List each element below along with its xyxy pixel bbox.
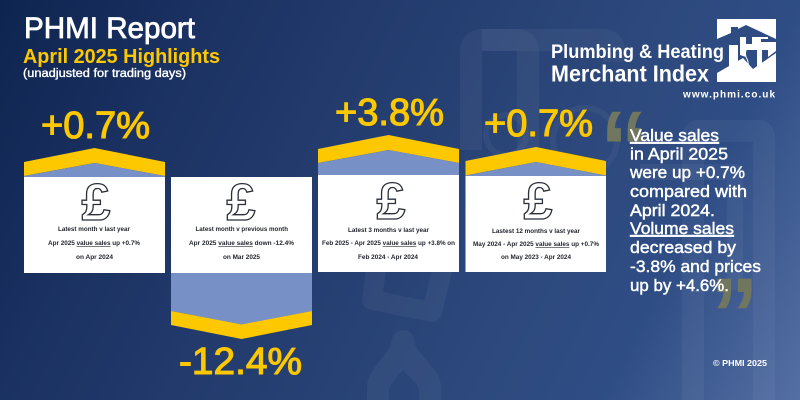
- card text: [189, 227, 295, 261]
- up chevron: [466, 147, 606, 176]
- bar: [171, 273, 312, 325]
- card text: Feb 2024 - Apr 2024: [358, 255, 419, 261]
- website: www.phmi.co.uk: [682, 90, 775, 101]
- up chevron: [318, 135, 459, 163]
- card text: May 2024 - Apr 2025 value sales up +0.7%: [473, 242, 600, 248]
- bar: [318, 150, 459, 175]
- icon: pound: £: [227, 174, 256, 232]
- bar: [466, 162, 606, 177]
- icon: house and tap: [717, 19, 776, 82]
- panel: latest 3 months v last year: [318, 92, 459, 272]
- summary text: Value sales: [630, 126, 719, 145]
- icon: pound: £: [82, 174, 111, 232]
- up chevron: [24, 148, 165, 176]
- down chevron: [171, 311, 312, 339]
- card text: on May 2023 - Apr 2024: [501, 255, 572, 261]
- card: [24, 177, 165, 273]
- panel: latest 12 months v last year: [466, 103, 606, 272]
- card text: on Apr 2024: [76, 255, 114, 261]
- summary text: Volume sales: [630, 219, 734, 238]
- card text: Latest month v last year: [58, 227, 131, 233]
- panel: latest month v previous month: [171, 174, 312, 383]
- subtitle: April 2025 Highlights: [23, 46, 220, 68]
- card: [466, 176, 606, 272]
- copyright: © PHMI 2025: [713, 358, 767, 368]
- card: [318, 175, 459, 272]
- summary text: [629, 126, 761, 295]
- card text: Lastest 12 months v last year: [492, 229, 581, 235]
- figure: +0.7%: [41, 105, 150, 147]
- heading block: [23, 12, 220, 80]
- card: [171, 177, 312, 273]
- logo wordmark second line: Merchant Index: [551, 60, 709, 86]
- card text: [473, 229, 600, 261]
- card text: Latest month v previous month: [196, 227, 288, 233]
- panel: latest month v last year: [24, 105, 165, 273]
- figure: +3.8%: [335, 92, 444, 134]
- summary text: April 2024.: [630, 201, 715, 220]
- summary text: -3.8% and prices: [630, 257, 761, 276]
- icon: pound: £: [377, 173, 406, 231]
- card text: [322, 228, 455, 261]
- figure: +0.7%: [484, 103, 593, 145]
- summary text: decreased by: [630, 238, 737, 257]
- figure: -12.4%: [179, 341, 302, 383]
- card text: Feb 2025 - Apr 2025 value sales up +3.8% on: [322, 241, 455, 247]
- icon: pound: £: [524, 173, 553, 231]
- title: PHMI Report: [24, 12, 195, 45]
- logo wordmark: Plumbing & Heating: [551, 41, 724, 63]
- logo: [551, 19, 776, 101]
- card text: Apr 2025 value sales up +0.7%: [48, 241, 141, 247]
- card text: on Mar 2025: [223, 255, 261, 261]
- icon: closing quote: ”: [710, 257, 759, 374]
- icon: opening quote: “: [600, 90, 649, 207]
- background plumbing watermark: [367, 40, 764, 400]
- note: (unadjusted for trading days): [23, 68, 186, 80]
- summary text: compared with: [630, 182, 747, 201]
- bar: [24, 163, 165, 178]
- summary text: in April 2025: [630, 144, 728, 164]
- card text: [48, 227, 141, 261]
- card text: Apr 2025 value sales down -12.4%: [189, 241, 295, 247]
- summary text: were up +0.7%: [629, 163, 745, 182]
- card text: Latest 3 months v last year: [348, 228, 430, 234]
- summary text: up by +4.6%.: [630, 276, 729, 295]
